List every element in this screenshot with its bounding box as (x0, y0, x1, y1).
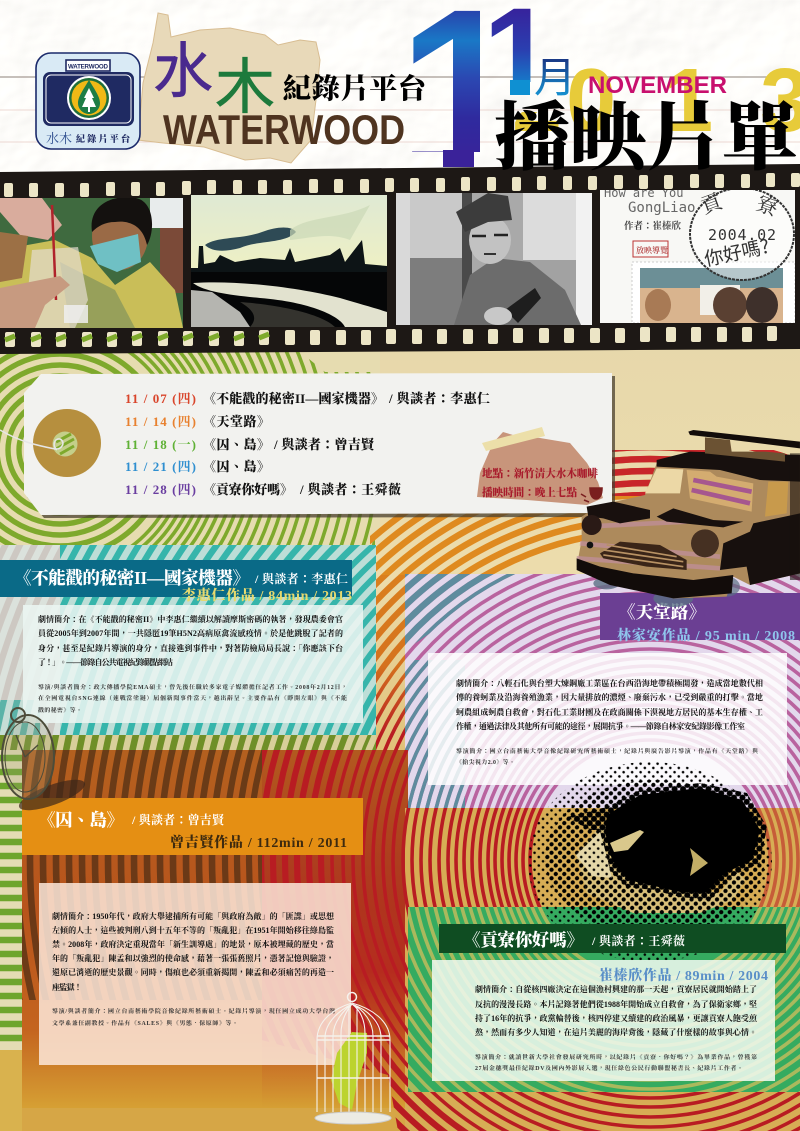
panel: film 2 header: 《天堂路》 (618, 602, 706, 622)
panel: red rings right column (405, 808, 800, 1131)
panel: film 4 header and text: 持了16年的抗爭，政黨輪替後，核四停建又續建的政治風暴，更讓貢寮人飽受煎 (475, 1013, 758, 1023)
tag reinforcement ring (33, 409, 101, 477)
brand: 水木 (153, 23, 275, 126)
panel: film 2 text box: 作權，通過法律及其他所有可能的途徑，展開抗爭。——節錄自林家安紀錄影像工作室 (456, 721, 745, 731)
brand: 紀錄片平台: 紀錄片平台 (283, 72, 428, 105)
panel: film 4 header and text: 導演簡介：就讀世新大學社會發展研究所時，以紀錄片《貢寮．你好嗎？》為畢業作品，曾獲第 (475, 1053, 757, 1061)
panel: film 1 header and text: 李惠仁作品 / 84min / 2013 (182, 587, 352, 604)
date row 3 (125, 437, 377, 453)
date row 1: 《不能戳的秘密II—國家機器》 (203, 391, 384, 406)
wire string (0, 430, 63, 450)
photo: film poster How are you GongLiao: How are You (604, 186, 683, 200)
brand: WATERWOOD: WATERWOOD (163, 106, 405, 153)
stamp: 2004.02 (708, 226, 776, 244)
panel: film 4 header and text: 熬，然而有多少人知道，在這片美麗的海岸背後，隱藏了什麼樣的故事與心情。 (475, 1027, 757, 1037)
stamp: 寮 (753, 191, 781, 221)
icon: coffee cup (581, 488, 602, 502)
panel: film 3 header and text: 《囚、島》 (38, 810, 124, 830)
panel: teal background for first film (0, 545, 376, 735)
date row 4: 《囚、島》 (203, 459, 270, 474)
brand: 水木: 木 (215, 39, 275, 126)
date row 2: 《天堂路》 (203, 414, 270, 429)
photo: factory smoke over river (191, 195, 387, 327)
date row 5: 11 / 28 (四) (125, 482, 196, 497)
panel: lilac background for second film (405, 574, 800, 808)
panel: film 1 header and text (0, 560, 363, 723)
panel: film 2 text box: 《搶尖視力2.0》等。 (456, 758, 515, 766)
date row 1: / 與談者：李惠仁 (388, 391, 490, 407)
background: colour ring field (0, 340, 800, 1131)
date row 5: 《貢寮你好嗎》 (203, 482, 293, 498)
panel: film 3 header and text: 導演/與談者簡介：國立台南藝術學院音像紀錄所藝術碩士。紀錄片導演，現任國立成功大學台灣 (52, 1007, 335, 1015)
brand: 水木: 水 (153, 23, 213, 110)
film strip (0, 164, 800, 354)
heading: 月: 月 (534, 44, 576, 105)
panel: left column green stripes (0, 735, 376, 1131)
date row 5: / 與談者：王舜薇 (299, 482, 401, 498)
panel: film 3 header and text: 文學系兼任副教授。作品有《SALES》與《男態．保原師》等。 (52, 1019, 238, 1027)
panel: film 4 header and text: 崔榛欣作品 / 89min / 2004 (599, 967, 768, 984)
panel: film 1 header and text: 身分，甚至是紀錄片導演的身分，直接進到事件中，對著防檢局局長說：「你應該下台 (38, 643, 344, 653)
icon: vintage car (577, 430, 800, 607)
panel: film 2 text box: 蚵農組成蚵農自救會，對石化工業財團及在政商關係下漠視地方居民的基本生存權、工 (456, 707, 763, 717)
crumpled paper background (0, 0, 800, 180)
photo: film poster How are you GongLiao: 作者：崔榛欣 (624, 220, 682, 232)
date row 3: 11 / 18 (一) (125, 437, 196, 452)
date row 4: 11 / 21 (四) (125, 459, 196, 474)
logo: camera badge: 紀錄片平台 (76, 133, 131, 144)
panel: film 4 header and text (432, 924, 786, 1081)
note: torn paper with venue and time (477, 427, 603, 505)
notebook ruling lines (0, 77, 800, 142)
panel: film 1 header and text: 導演/與談者簡介：政大傳播學院EMA碩士，曾先後任職於多家電子媒體擔任記者工作。2008年2月12日， (38, 683, 347, 691)
big number 11 (412, 8, 530, 167)
panel: film 1 header and text: 《不能戳的秘密II—國家機器》 (14, 568, 250, 588)
photo: film poster How are you GongLiao (600, 186, 795, 323)
panel: film 3 header and text: 左傾的人士，這些被判刑八到十五年不等的「叛亂犯」在1951年開始移往綠島監 (52, 925, 334, 935)
panel: film 3 header and text: 年的「叛亂犯」陳孟和以強烈的使命感，藉著一張張舊照片，憑著記憶與驗證， (52, 953, 334, 963)
date row 3: 《囚、島》 (203, 437, 270, 452)
note: torn paper with venue and time: 地點：新竹清大水木咖啡 (482, 467, 598, 480)
panel: film 2 text box: 劇情簡介：八輕石化與台塑大煉鋼廠工業區在台西沿海地帶積極開發，造成當地數代相 (456, 678, 763, 688)
panel: film 2 text box (428, 653, 787, 785)
logo: camera badge: WATERWOOD (68, 64, 109, 70)
stamp: 貢 (698, 189, 726, 219)
panel: film 4 header and text: / 與談者：王舜薇 (591, 933, 685, 948)
panel: film 2 header (600, 593, 800, 644)
panel: film 3 header and text: 還原已消逝的歷史景觀。同時，傷痕也必須重新揭開，陳孟和必須痛苦的再造一 (52, 967, 334, 977)
date row 1: 11 / 07 (四) (125, 391, 196, 406)
panel: red-orange background for third film (22, 750, 408, 1131)
panel: green background for fourth film (408, 907, 800, 1092)
logo: camera badge: 水木 (46, 131, 72, 146)
photo: black and white soldier with guitar (396, 193, 592, 325)
photo: man with mask and sample bag (0, 197, 183, 328)
icon: halftone eye (528, 762, 772, 962)
panel: film 4 header and text: 劇情簡介：自從核四廠決定在這個漁村興建的那一天起，貢寮居民就開始踏上了 (475, 984, 757, 994)
panel: film 4 header and text: 反抗的漫漫長路。本片記錄著他們從1988年開始成立自救會，為了保衛家鄉，堅 (475, 999, 757, 1009)
panel: film 4 header and text: 27屆金穗獎最佳紀錄DV及國內外影展入選，現任綠色公民行動聯盟秘書長、紀錄片工作者。 (475, 1064, 743, 1072)
panel: film 3 header and text: 曾吉賢作品 / 112min / 2011 (170, 834, 347, 851)
date row 4 (125, 459, 270, 474)
panel: film 1 header and text: 了！」。——節錄自公共電視紀錄觀點網站 (38, 657, 173, 667)
panel: film 1 header and text: 員從2005年到2007年間，一共隱匿19筆H5N2高病原禽流感疫情。於是他跳脫了記者的 (38, 628, 343, 638)
torn paper behind logo (138, 13, 320, 163)
date row 5 (125, 482, 401, 498)
panel: film 2 text box: 傳的養蚵業及沿海養殖漁業，因大量排放的濃煙、廢棄污水，已受到嚴重的打擊。當地 (456, 692, 763, 702)
panel: film 3 header and text: 禁。2008年，政府決定重現當年「新生訓導處」的地景，原本被埋藏的歷史，當 (52, 939, 334, 949)
photo: film poster How are you GongLiao: 放映導覽 (636, 245, 668, 255)
sprocket holes bottom (5, 326, 777, 347)
panel: film 2 header: 林家安作品 / 95 min / 2008 (617, 627, 795, 644)
panel: film 1 header and text: 戳的秘密》等。 (38, 706, 82, 714)
stamp: 你好嗎? (702, 232, 772, 272)
heading: 播映片單: 播映片單 (494, 98, 798, 180)
date row 3: / 與談者：曾吉賢 (273, 437, 377, 453)
date row 1 (125, 391, 490, 407)
panel: film 3 header and text: 劇情簡介：1950年代，政府大舉逮捕所有可能「與政府為敵」的「匪諜」或思想 (52, 911, 335, 921)
panel: film 1 header and text: / 與談者：李惠仁 (254, 571, 348, 586)
panel: film 3 header and text (22, 798, 363, 1065)
photo: film poster How are you GongLiao: GongLiao (628, 200, 695, 216)
panel: film 3 header and text: / 與談者：曾吉賢 (131, 812, 226, 827)
panel: film 2 text box: 導演簡介：國立台南藝術大學音像紀錄研究所藝術碩士，紀錄片與廣告影片導演，作品有《天堂路》與 (456, 747, 759, 755)
icon: pocket watch (2, 708, 88, 816)
stamp (690, 188, 794, 280)
panel: film 4 header and text: 《貢寮你好嗎》 (463, 930, 584, 950)
panel: film 1 header and text: 在全國電視台SNG連線（速戰當塗鏈）屆個新聞事件當天，越出辭呈。主要作品有《睜開左眼》與《不能 (38, 694, 347, 702)
icon: birdcage with Taiwan (315, 992, 391, 1124)
logo: camera badge (36, 53, 140, 149)
sprocket holes top (4, 173, 800, 197)
panel: film 3 header and text: 座監獄！ (52, 982, 82, 992)
panel: film 1 header and text: 劇情簡介：在《不能戳的秘密II》中李惠仁繼續以解讀摩斯密碼的執著，發現農委會官 (38, 614, 343, 624)
date row 2: 11 / 14 (四) (125, 414, 196, 429)
note: torn paper with venue and time: 播映時間：晚上七點 (482, 486, 577, 499)
date row 2 (125, 414, 270, 429)
schedule tag (0, 373, 615, 518)
heading: NOVEMBER: NOVEMBER (588, 72, 727, 99)
